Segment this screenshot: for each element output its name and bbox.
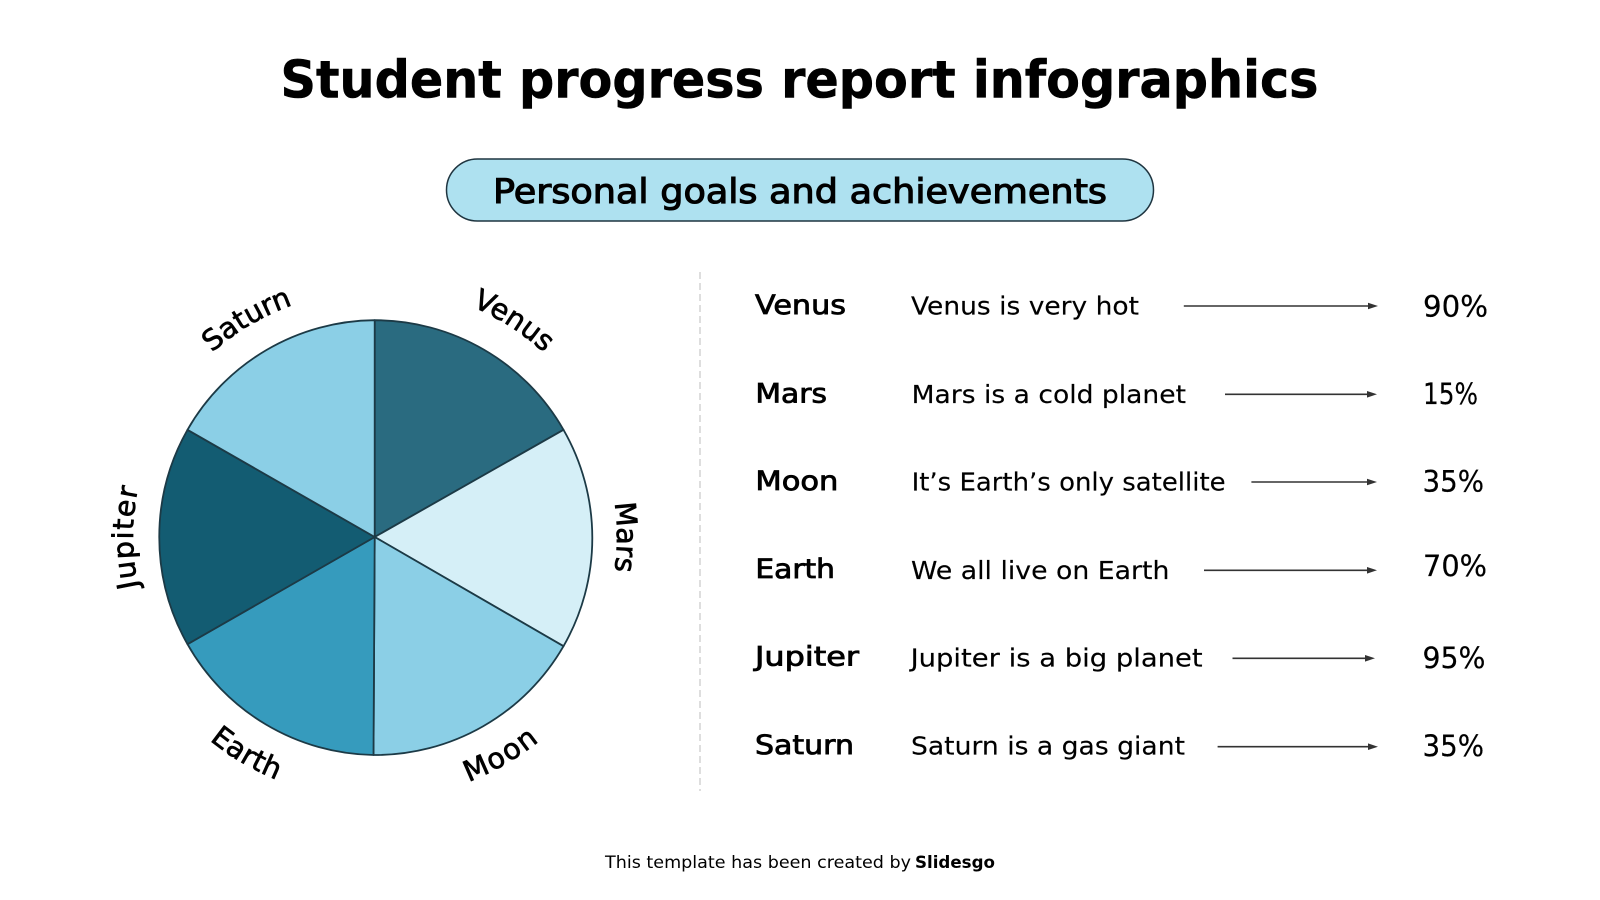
description: Venus is very hot	[911, 292, 1139, 321]
pie label: Mars: Mars	[614, 503, 638, 572]
description: Jupiter is a big planet	[908, 644, 1203, 673]
percentage: 90%	[1423, 290, 1488, 324]
slice: Mars	[375, 430, 592, 646]
subtitle pill: Personal goals and achievements	[493, 172, 1107, 212]
percentage: 70%	[1423, 549, 1487, 583]
pie label: Earth: Earth	[211, 724, 280, 780]
name: Moon	[755, 466, 838, 497]
row: Saturn	[755, 729, 1484, 763]
percentage: 35%	[1422, 465, 1484, 499]
row: Earth	[755, 549, 1487, 585]
pie label: Venus: Venus	[479, 287, 553, 350]
arrow	[1225, 391, 1377, 398]
percentage: 95%	[1422, 641, 1486, 675]
slice: Saturn	[188, 320, 375, 537]
slice: Venus	[375, 320, 564, 537]
description: Saturn is a gas giant	[911, 732, 1185, 761]
row: Mars	[755, 377, 1478, 411]
footer credit: This template has been created by	[604, 853, 911, 873]
pie label: Saturn: Saturn	[202, 292, 291, 351]
arrow	[1184, 303, 1378, 309]
arrow	[1251, 479, 1377, 485]
subtitle pill	[446, 159, 1154, 221]
title: Student progress report infographics	[280, 50, 1318, 110]
row: Moon	[755, 465, 1484, 499]
arrow	[1204, 567, 1377, 574]
slice: Jupiter	[159, 430, 375, 644]
pie label: Moon: Moon	[462, 732, 538, 782]
footer credit: Slidesgo	[915, 853, 995, 873]
name: Venus	[755, 290, 846, 321]
arrow	[1218, 743, 1378, 750]
description: Mars is a cold planet	[912, 380, 1186, 409]
row: Jupiter	[753, 641, 1486, 675]
slice: Earth	[188, 537, 375, 755]
slice: Moon	[374, 537, 564, 755]
arrow	[1232, 655, 1375, 662]
description: We all live on Earth	[911, 556, 1169, 585]
percentage: 35%	[1422, 729, 1484, 763]
description: It’s Earth’s only satellite	[912, 468, 1226, 497]
name: Jupiter	[753, 642, 859, 673]
name: Saturn	[755, 730, 854, 761]
name: Earth	[755, 554, 835, 585]
row: Venus	[755, 290, 1488, 324]
pie label: Jupiter: Jupiter	[111, 484, 144, 589]
name: Mars	[755, 378, 827, 409]
pie chart	[159, 320, 592, 755]
percentage: 15%	[1423, 377, 1478, 411]
